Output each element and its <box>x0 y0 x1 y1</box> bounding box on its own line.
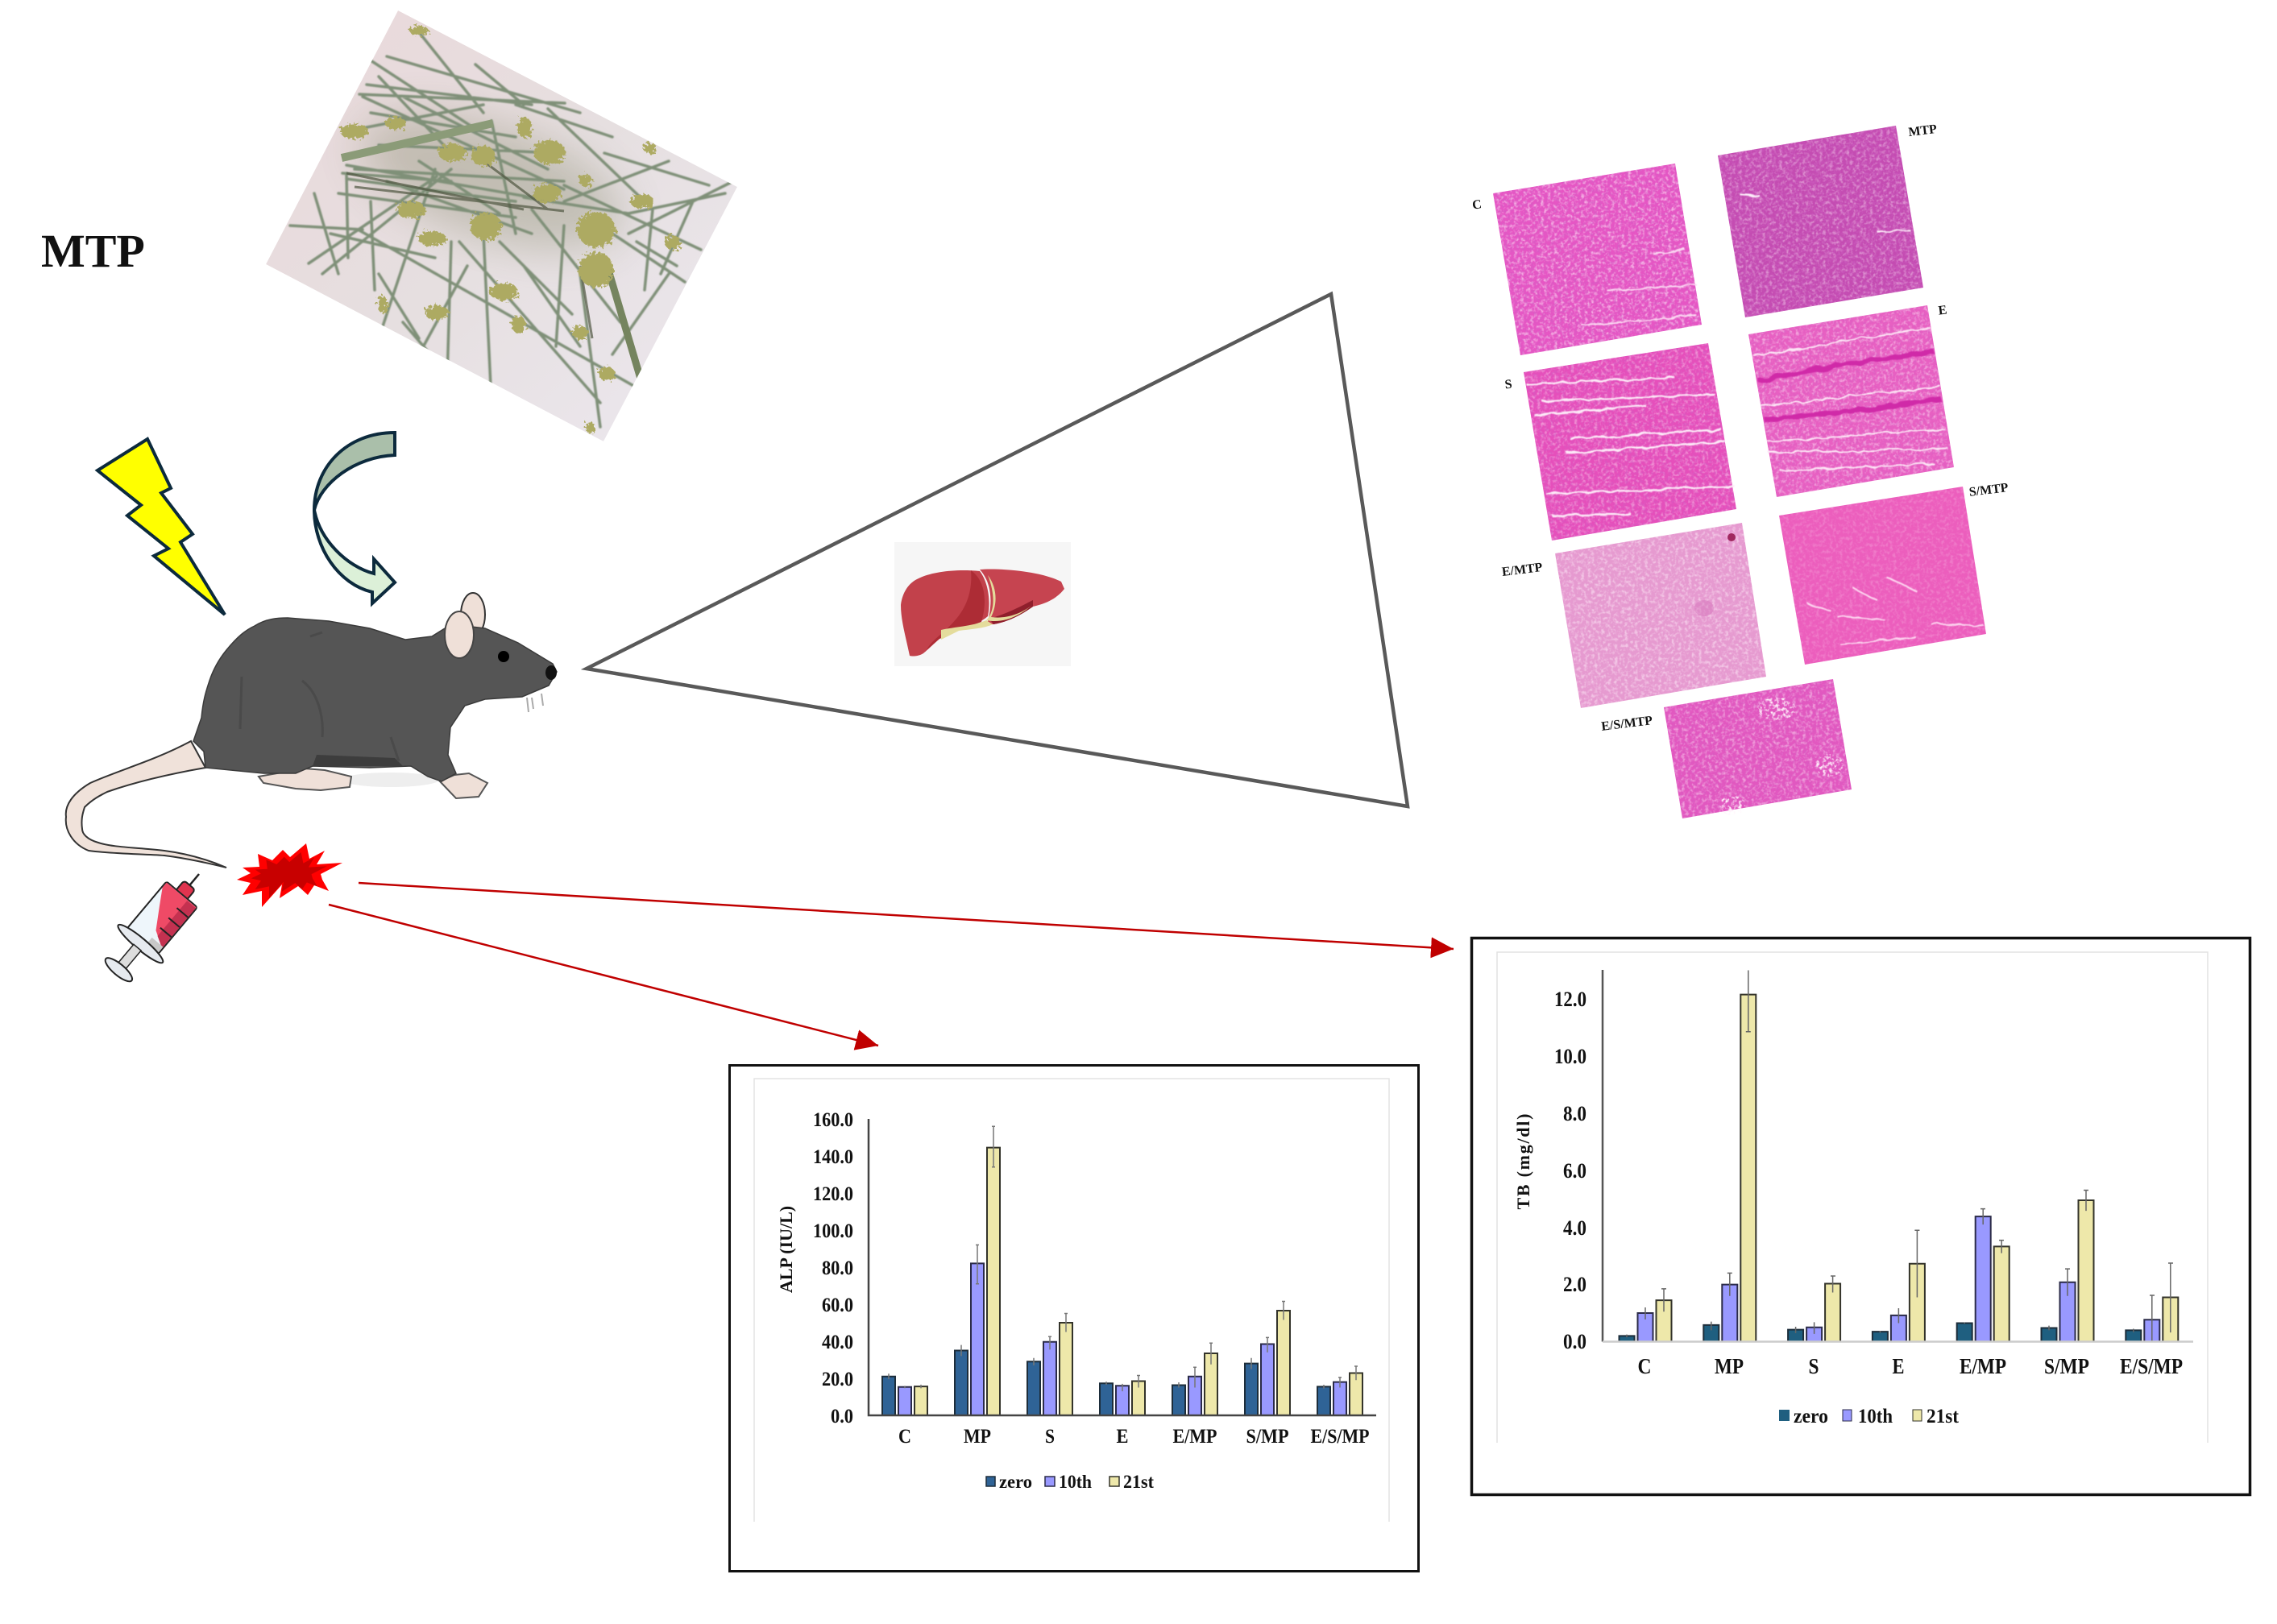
panel: ALP chart <box>730 1065 1418 1571</box>
axes <box>1602 970 1603 1342</box>
image: E/S/MTP tissue <box>1664 679 1852 818</box>
inner chart border <box>754 1079 1389 1522</box>
label: S/MTP: S/MTP <box>1968 481 2009 499</box>
legend <box>986 1472 1154 1492</box>
panel: histology S <box>1504 343 1736 541</box>
x axis labels: C <box>1637 1354 1652 1378</box>
x axis labels: S <box>1045 1426 1055 1448</box>
rat hind foot <box>259 768 351 790</box>
panel: histology C <box>1471 164 1702 355</box>
bars: zero <box>882 1350 1330 1415</box>
x axis labels <box>1637 1354 2183 1378</box>
y axis labels: 4.0 <box>1563 1216 1586 1240</box>
rat tail <box>66 741 226 868</box>
rat whiskers <box>527 694 543 712</box>
icon: lightning bolt <box>97 439 225 615</box>
panel: histology E <box>1748 303 1954 497</box>
icon: red burst <box>237 843 342 907</box>
label: E/MTP: E/MTP <box>1501 561 1544 579</box>
icon: syringe <box>93 856 222 992</box>
legend: zero <box>999 1472 1032 1492</box>
rat front ear <box>445 611 474 658</box>
panel: histology MTP <box>1718 122 1938 317</box>
image: MTP tissue <box>1718 126 1923 317</box>
y axis labels: 100.0 <box>813 1220 853 1242</box>
x axis labels: S/MP <box>1246 1426 1289 1448</box>
rat body <box>193 618 557 781</box>
photo: plant <box>266 10 737 441</box>
image: S tissue <box>1524 343 1736 541</box>
x axis labels: E <box>1892 1354 1905 1378</box>
label: S: S <box>1504 378 1513 392</box>
y axis title: ALP (IU/L) <box>776 1206 796 1293</box>
y axis labels: 12.0 <box>1554 988 1586 1011</box>
panel frame <box>1471 938 2250 1495</box>
x axis labels: S/MP <box>2044 1354 2089 1378</box>
title: MTP: MTP <box>41 225 145 277</box>
y axis labels: 140.0 <box>813 1146 853 1168</box>
y axis labels: 120.0 <box>813 1183 853 1205</box>
legend: 21st <box>1123 1472 1154 1492</box>
arrow to TB chart <box>359 883 1454 949</box>
y axis labels: 60.0 <box>822 1295 853 1316</box>
y axis labels: 160.0 <box>813 1109 853 1131</box>
inner chart border <box>1497 952 2208 1443</box>
bars: 21st <box>915 1148 1362 1415</box>
rat eye <box>498 651 509 662</box>
y axis labels: 6.0 <box>1563 1159 1586 1183</box>
rat shadow <box>342 773 439 787</box>
y axis labels <box>1554 988 1586 1353</box>
y axis title: TB (mg/dl) <box>1513 1113 1533 1210</box>
x axis labels: E <box>1117 1426 1128 1448</box>
image: E tissue <box>1748 305 1954 497</box>
y axis labels: 20.0 <box>822 1369 853 1390</box>
error bars <box>889 1126 1358 1391</box>
bars: 10th <box>898 1263 1346 1415</box>
x axis labels: S <box>1808 1354 1819 1378</box>
triangle callout <box>587 294 1408 806</box>
legend: 10th <box>1059 1472 1092 1492</box>
arrow to ALP chart <box>329 905 878 1046</box>
label: E/S/MTP: E/S/MTP <box>1600 714 1653 734</box>
rat belly shading <box>313 755 403 766</box>
x axis labels: E/S/MP <box>2120 1354 2183 1378</box>
y axis labels: 10.0 <box>1554 1045 1586 1068</box>
x axis labels: MP <box>964 1426 991 1448</box>
rat nose <box>545 665 557 680</box>
y axis labels: 0.0 <box>831 1406 853 1427</box>
x axis labels: E/MP <box>1173 1426 1217 1448</box>
image: S/MTP tissue <box>1779 487 1986 665</box>
image: C tissue <box>1493 164 1702 355</box>
y axis labels: 80.0 <box>822 1257 853 1279</box>
legend: 21st <box>1927 1406 1960 1427</box>
x axis labels: C <box>898 1426 911 1448</box>
panel: histology E/MTP <box>1501 523 1766 708</box>
legend <box>1779 1406 1960 1427</box>
rat front foot <box>440 773 487 798</box>
x axis labels: MP <box>1715 1354 1744 1378</box>
rat fur folds <box>240 632 399 761</box>
image: E/MTP tissue <box>1555 523 1766 708</box>
label: C: C <box>1471 197 1483 213</box>
axes <box>869 1119 1376 1415</box>
bars: zero <box>1620 1323 2141 1342</box>
y axis labels <box>813 1109 853 1427</box>
panel: TB chart <box>1471 938 2250 1495</box>
bars: 21st <box>1657 995 2178 1342</box>
panel: histology S/MTP <box>1779 481 2009 665</box>
legend: zero <box>1794 1406 1828 1427</box>
label: E: E <box>1938 303 1947 318</box>
icon: liver <box>894 542 1071 666</box>
x axis labels: E/MP <box>1960 1354 2006 1378</box>
panel frame <box>730 1065 1418 1571</box>
x axis labels: E/S/MP <box>1310 1426 1370 1448</box>
panel: histology E/S/MTP <box>1600 679 1852 818</box>
label: MTP: MTP <box>1908 122 1938 139</box>
legend: 10th <box>1858 1406 1893 1427</box>
y axis labels: 40.0 <box>822 1332 853 1353</box>
rat back ear <box>461 593 485 636</box>
illustration: rat <box>66 593 557 868</box>
x axis labels <box>898 1426 1370 1448</box>
y axis labels: 2.0 <box>1563 1273 1586 1296</box>
y axis labels: 0.0 <box>1563 1330 1586 1353</box>
error bars <box>1627 971 2173 1342</box>
y axis labels: 8.0 <box>1563 1102 1586 1125</box>
icon: curved arrow <box>314 433 395 603</box>
bars: 10th <box>1637 1216 2159 1342</box>
